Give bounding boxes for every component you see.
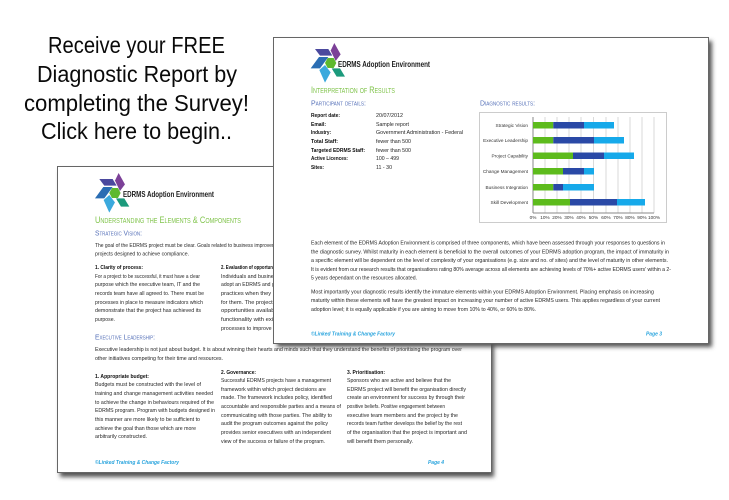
- axis labels: 60%: [601, 215, 611, 220]
- footer: page 4: ©Linked Training & Change Factory: [95, 459, 180, 466]
- text block: governance: communicating with those parties. The ability to: [221, 413, 333, 419]
- footer: page 4: Page 4: [428, 460, 444, 466]
- category labels: Executive Leadership: [483, 138, 528, 143]
- text block: interpretation paragraph 2: [311, 290, 660, 313]
- text block: governance: accountable and responsible parties and a means of: [221, 404, 341, 410]
- table: participant details: Sites:: [311, 165, 324, 171]
- text block: executive leadership intro: [95, 347, 462, 362]
- logo title: EDRMS Adoption Environment: [338, 60, 430, 69]
- text block: evaluation of opportunities: functionality with existi: [221, 317, 279, 323]
- subheading: strategic vision: Strategic Vision:: [95, 228, 142, 238]
- icon: page 4 logo: [95, 173, 129, 213]
- table: participant details: Report date:: [311, 113, 340, 119]
- table: participant details: fewer than 500: [376, 139, 412, 145]
- text block: prioritisation: create an environment for success by through their: [347, 395, 465, 401]
- table: participant details: fewer than 500: [376, 148, 412, 154]
- text block: interpretation paragraph 1: 5 years dependant on the resources allocated.: [311, 276, 417, 282]
- text block: governance: Successful EDRMS projects have a management: [221, 378, 331, 384]
- table: participant details: 100 – 499: [376, 156, 399, 162]
- text block: interpretation paragraph 1: It is evident from our research results that organisations rating 80% average across all elements are achieving levels of 70%+ active EDRMS users' within a 2-: [311, 267, 671, 273]
- subheading: diagnostic results: Diagnostic results:: [480, 98, 535, 108]
- text block: prioritisation: EDRMS project will benefit the organisation directly: [347, 387, 466, 393]
- text block: clarity of process: processes in place to measure indicators which: [95, 300, 203, 306]
- text block: interpretation paragraph 1: a specific element will be dependent on the level of complexity of your organisations (e.g. size and no. of sites) and the level of maturity in other elements.: [311, 258, 668, 264]
- text block: governance: 2. Governance:: [221, 370, 256, 376]
- axis labels: 40%: [576, 215, 586, 220]
- text block: governance: [221, 370, 341, 445]
- text block: evaluation of opportunities: adopt an EDRMS and get: [221, 282, 279, 288]
- heading: call to action: completing the Survey!: [24, 90, 249, 116]
- heading: call to action: Click here to begin..: [41, 118, 232, 144]
- subheading: executive leadership: Executive Leadership:: [95, 332, 155, 342]
- text block: prioritisation: executive team members and the project by the: [347, 413, 459, 419]
- text block: interpretation paragraph 2: adoption level; it is equally applicable if you are aiming to move from 10% to 40%, or 60% to 80%.: [311, 307, 536, 313]
- text block: evaluation of opportunities: Individuals and business: [221, 274, 279, 280]
- bar: executive leadership: [533, 137, 624, 144]
- text block: clarity of process: purpose.: [95, 317, 115, 323]
- text block: appropriate budget: training and change management activities needed: [95, 391, 213, 397]
- table: participant details: 11 - 30: [376, 165, 393, 171]
- text block: appropriate budget: to achieve the change in behaviours required of the: [95, 400, 215, 406]
- footer: page 3: Page 3: [646, 332, 662, 338]
- text block: executive leadership intro: Executive leadership is not just about budget. It is about winning their hearts and minds such that they understand the benefits of prioritising the program over: [95, 347, 462, 353]
- text block: appropriate budget: this manner are more likely to be sufficient to: [95, 417, 201, 423]
- bar: business integration: [533, 184, 594, 190]
- category labels: Change Management: [483, 169, 529, 174]
- axis labels: 80%: [625, 215, 635, 220]
- text block: governance: provides senior executives with an independent: [221, 430, 331, 436]
- text block: interpretation paragraph 1: Each element of the EDRMS Adoption Environment is comprised of three components, which have been assessed through your responses to questions in: [311, 241, 665, 247]
- category labels: Skill Development: [490, 200, 529, 205]
- text block: evaluation of opportunities: processes to improve pe: [221, 326, 280, 332]
- bar: strategic vision: [533, 122, 614, 128]
- text block: evaluation of opportunities: [221, 265, 283, 332]
- table: participant details: Government Administration - Federal: [376, 130, 463, 136]
- text block: prioritisation: of the organisation that the project is important and: [347, 430, 467, 436]
- panel: report page 3: [274, 38, 712, 347]
- heading: call to action: Receive your FREE: [48, 32, 225, 58]
- text block: appropriate budget: achieve the goal than those which are more: [95, 426, 197, 432]
- axis labels: 0%: [530, 215, 536, 220]
- table: participant details: Targeted EDRMS Staff:: [311, 148, 365, 154]
- text block: clarity of process: demonstrate that the project has achieved its: [95, 308, 201, 314]
- text block: prioritisation: will benefit them personally.: [346, 439, 413, 445]
- table: participant details: Sample report: [376, 122, 409, 128]
- text block: interpretation paragraph 2: Most importantly your diagnostic results identify the immature elements within your EDRMS Adoption Environment. Placing emphasis on increasing: [311, 290, 654, 296]
- page 4 heading: Understanding the Elements & Components: [95, 215, 241, 226]
- text block: prioritisation: records team further develops the belief by the rest: [347, 421, 462, 427]
- axis labels: 100%: [648, 215, 660, 220]
- axis labels: 90%: [637, 215, 647, 220]
- heading: call to action: [24, 32, 249, 144]
- page 3 heading: Interpretation of Results: [311, 85, 395, 96]
- text block: governance: view of the success or failure of the program.: [221, 439, 325, 445]
- text block: appropriate budget: EDRMS program. Program with budgets designed in: [95, 408, 215, 414]
- footer: page 3: [311, 331, 662, 338]
- bar: change management: [533, 168, 594, 174]
- text block: governance: made. The framework includes policy, identified: [221, 395, 332, 401]
- axis labels: 30%: [564, 215, 574, 220]
- text block: prioritisation: Sponsors who are active and believe that the: [347, 378, 452, 384]
- text block: evaluation of opportunities: 2. Evaluation of opportunities:: [221, 265, 283, 271]
- axis labels: [530, 215, 660, 220]
- subheading: participant details: Participant details:: [311, 98, 366, 108]
- text block: evaluation of opportunities: practices when they be: [221, 291, 280, 297]
- table: participant details: Industry:: [311, 130, 331, 136]
- text block: appropriate budget: Budgets must be constructed with the level of: [95, 382, 201, 388]
- axis labels: 10%: [540, 215, 550, 220]
- text block: appropriate budget: 1. Appropriate budget:: [95, 374, 149, 380]
- text block: interpretation paragraph 2: maturity within these elements will have the greatest impact on increasing your number of active EDRMS users. This applies regardless of your current: [311, 298, 660, 304]
- text block: clarity of process: 1. Clarity of process:: [95, 265, 143, 271]
- text block: clarity of process: [95, 265, 205, 323]
- text block: clarity of process: purpose which the executive team, IT and the: [95, 282, 201, 288]
- text block: prioritisation: positive beliefs. Positive engagement between: [347, 404, 445, 410]
- text block: appropriate budget: arbitrarily constructed.: [95, 434, 147, 440]
- text block: interpretation paragraph 1: the diagnostic survey. Whilst maturity in each element is beneficial to the overall outcomes of your EDRMS adoption program, the impact of immaturity in: [311, 250, 669, 256]
- text block: governance: audit the program outcomes against the policy: [221, 421, 328, 427]
- bar: skill development: [533, 199, 645, 206]
- footer: page 4: [95, 459, 444, 466]
- axis labels: 70%: [613, 215, 623, 220]
- table: participant details: Active Licences:: [311, 156, 348, 162]
- text block: evaluation of opportunities: opportunities available: [221, 308, 280, 314]
- heading: call to action: Diagnostic Report by: [37, 61, 237, 87]
- text block: strategic vision intro: projects designed to achieve compliance.: [95, 252, 189, 258]
- panel: report page 4: [58, 166, 494, 477]
- logo title: EDRMS Adoption Environment: [123, 190, 214, 199]
- axis labels: 50%: [589, 215, 598, 220]
- category labels: Strategic Vision: [496, 123, 528, 128]
- table: participant details: Email:: [311, 122, 326, 128]
- text block: appropriate budget: [95, 374, 215, 440]
- table: participant details: Total Staff:: [311, 139, 338, 145]
- icon: page 3 logo: [311, 43, 345, 83]
- table: participant details: 20/07/2012: [376, 113, 403, 119]
- text block: interpretation paragraph 1: [311, 241, 671, 282]
- text block: prioritisation: 3. Prioritisation:: [347, 370, 385, 376]
- category labels: Business Integration: [486, 185, 528, 190]
- text block: prioritisation: [346, 370, 467, 445]
- footer: page 3: ©Linked Training & Change Factory: [311, 331, 396, 338]
- text block: governance: framework within which project decisions are: [221, 387, 327, 393]
- text block: strategic vision intro: The goal of the EDRMS project must be clear. Goals related to business improvement: [95, 243, 283, 249]
- text block: strategic vision intro: [95, 243, 283, 258]
- text block: clarity of process: records team have all agreed to. There must be: [95, 291, 205, 297]
- text block: clarity of process: For a project to be successful, it must have a clear: [95, 274, 200, 280]
- bar chart: diagnostic results: [480, 112, 666, 222]
- category labels: Project Capability: [492, 154, 529, 158]
- text block: evaluation of opportunities: for them. The project te: [221, 300, 280, 306]
- axis labels: 20%: [552, 215, 562, 220]
- bar: project capability: [533, 152, 634, 159]
- table: participant details: [311, 113, 463, 171]
- text block: executive leadership intro: other initiatives competing for their time and resources.: [95, 356, 223, 362]
- category labels: [483, 123, 529, 205]
